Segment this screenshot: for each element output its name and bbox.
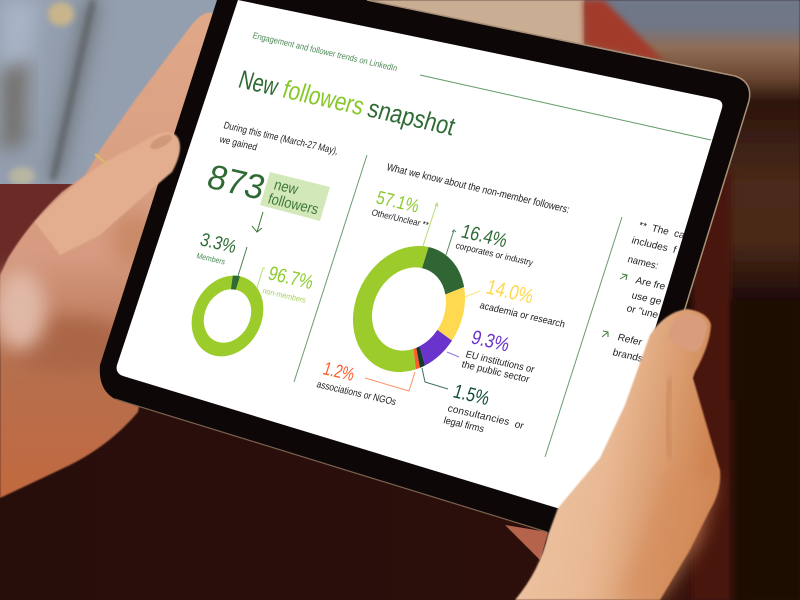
footnote panel, cropped by the tablet edge: Refer	[616, 332, 644, 349]
non-members label	[256, 266, 312, 303]
screen content	[189, 30, 711, 457]
label: other or unclear	[370, 188, 438, 246]
label: corporates: 16.4%	[458, 221, 510, 252]
label: consultancies: or	[513, 419, 526, 432]
label: consultancies	[422, 368, 526, 435]
label: corporates: corporates or industry	[454, 240, 535, 268]
eyebrow heading: Engagement and follower trends on LinkedIn	[251, 30, 399, 73]
intro text: During this time (March-27 May),	[222, 120, 339, 157]
label: other or unclear: 57.1%	[373, 188, 422, 217]
footnote panel, cropped by the tablet edge: Are fre	[634, 275, 667, 293]
label: EU institutions: the public sector	[460, 359, 531, 386]
members label: 3.3%	[197, 230, 239, 258]
big donut: sectors of non-member followers	[352, 246, 465, 372]
footnote panel, cropped by the tablet edge: ** The ca	[637, 220, 687, 242]
label: academia	[465, 280, 564, 328]
new followers badge	[260, 172, 330, 221]
new followers badge: new	[272, 177, 300, 198]
tablet body	[100, 0, 750, 545]
left hand behind tablet	[0, 13, 260, 498]
left index finger over bezel	[35, 132, 180, 255]
members label: Members	[195, 251, 226, 266]
small donut: members	[192, 276, 264, 356]
tablet screen	[117, 0, 722, 520]
intro text: we gained	[217, 134, 258, 153]
chart heading: What we know about the non-member followers:	[385, 162, 571, 216]
label: other or unclear: Other/Unclear **	[370, 207, 430, 230]
intro text	[220, 122, 337, 156]
footnote panel, cropped by the tablet edge: includes f	[630, 235, 678, 256]
footnote panel, cropped by the tablet edge: or "une	[625, 303, 660, 321]
arrow down	[252, 212, 263, 232]
new followers badge: followers	[266, 191, 321, 218]
label: consultancies: consultancies	[446, 403, 511, 428]
non-members label: 96.7%	[265, 263, 316, 294]
big number 873: 873	[203, 158, 270, 207]
label: EU institutions: EU institutions or	[464, 349, 536, 376]
label: associations: 1.2%	[320, 359, 357, 386]
label: corporates	[446, 224, 534, 267]
label: EU institutions: 9.3%	[468, 327, 512, 356]
non-members label: non-members	[261, 286, 307, 305]
footnote panel, cropped by the tablet edge: use ge	[630, 290, 663, 308]
label: consultancies: legal firms	[442, 415, 485, 435]
label: associations: associations or NGOs	[315, 379, 397, 408]
label: academia: 14.0%	[483, 276, 536, 308]
right hand and thumb	[515, 309, 720, 600]
label: consultancies: 1.5%	[450, 381, 492, 410]
footnote panel, cropped by the tablet edge: names:	[626, 254, 660, 272]
title: New	[235, 66, 282, 101]
title: followers	[279, 76, 368, 121]
footnote panel, cropped by the tablet edge: brands	[611, 347, 644, 365]
footnote panel, cropped by the tablet edge	[602, 220, 687, 365]
title: snapshot	[364, 95, 459, 141]
title	[238, 70, 456, 136]
members label	[195, 230, 247, 276]
label: EU institutions	[446, 330, 535, 382]
label: academia: academia or research	[478, 300, 566, 330]
label: associations	[316, 362, 416, 405]
